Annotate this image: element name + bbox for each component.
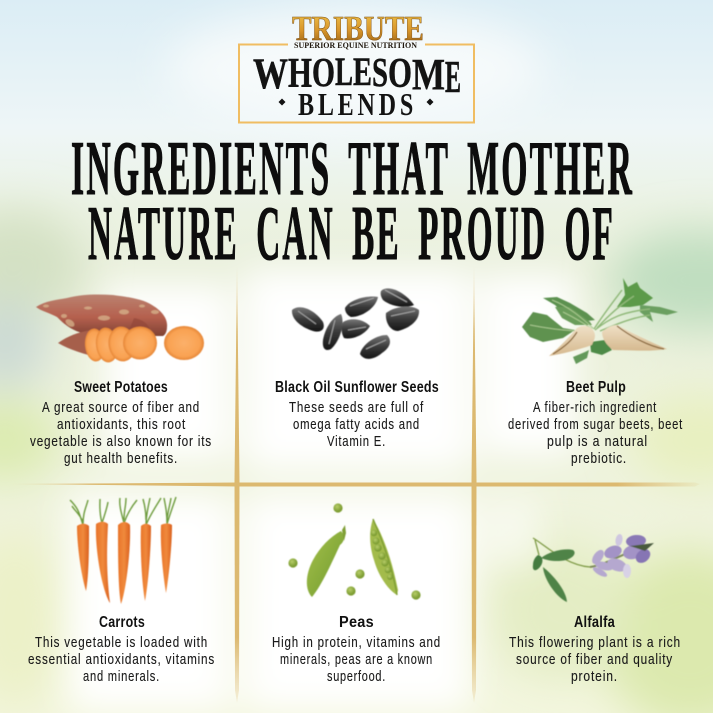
text: peas: superfood. [327,669,386,685]
text: alfalfa: source of fiber and quality [516,652,673,668]
wholesome wordmark: E [353,49,372,94]
icon: beet [522,278,678,364]
wholesome wordmark: L [335,49,353,94]
text: carrots: essential antioxidants, vitamins [28,652,215,668]
text: beet pulp: prebiotic. [571,451,627,467]
text: sweet potatoes: antioxidants, this root [57,417,186,433]
text: alfalfa: This flowering plant is a rich [509,635,681,651]
text: peas: High in protein, vitamins and [272,635,441,651]
text: beet pulp [508,400,683,467]
heading: carrots: Carrots [99,614,145,631]
logo frame [239,44,474,122]
heading: peas: Peas [339,614,374,631]
text: sunflower seeds [289,400,424,450]
heading: beet pulp: Beet Pulp [566,379,626,396]
panel: beet pulp [508,278,683,467]
panel: peas [272,503,441,685]
brand name: TRIBUTE [292,9,424,48]
icon: sweet potatoes [36,294,204,364]
icon: peas [288,503,421,600]
text: sweet potatoes: gut health benefits. [64,451,178,467]
title [71,125,634,276]
wholesome wordmark: M [412,50,445,99]
text: sunflower seeds: omega fatty acids and [293,417,420,433]
wholesome wordmark: S [372,49,388,95]
text: beet pulp: pulp is a natural [547,434,648,450]
text: sunflower seeds: These seeds are full of [289,400,424,416]
heading: sweet potatoes: Sweet Potatoes [74,379,168,396]
icon: carrots [70,497,176,604]
wholesome wordmark: H [288,51,312,97]
icon: alfalfa [533,533,654,602]
heading: alfalfa: Alfalfa [574,614,615,631]
wholesome wordmark: O [388,51,412,97]
text: alfalfa [509,635,681,685]
wholesome wordmark: W [253,51,288,98]
logo diamonds [278,98,434,106]
panel: sunflower seeds [275,288,439,450]
text: sweet potatoes [30,400,212,467]
icon: sunflower seeds [292,288,419,359]
heading: sunflower seeds: Black Oil Sunflower Seeds [275,379,439,396]
text: sweet potatoes: A great source of fiber and [42,400,200,416]
text: beet pulp: A fiber-rich ingredient [533,400,657,416]
logo [239,9,474,122]
text: carrots: This vegetable is loaded with [35,635,208,651]
text: peas: minerals, peas are a known [280,652,433,668]
text: sunflower seeds: Vitamin E. [327,434,386,450]
wholesome wordmark: O [312,49,335,95]
text: carrots: and minerals. [83,669,160,685]
panel: carrots [28,497,215,685]
text: alfalfa: protein. [571,669,618,685]
brand tagline: SUPERIOR EQUINE NUTRITION [294,41,417,50]
panel: sweet potatoes [30,294,212,467]
text: sweet potatoes: vegetable is also known for its [30,434,212,450]
gold grid dividers [8,265,700,703]
panel: alfalfa [509,533,681,685]
wholesome wordmark: E [445,51,461,102]
text: carrots [28,635,215,685]
blends wordmark: BLENDS [298,86,417,122]
text: peas [272,635,441,685]
